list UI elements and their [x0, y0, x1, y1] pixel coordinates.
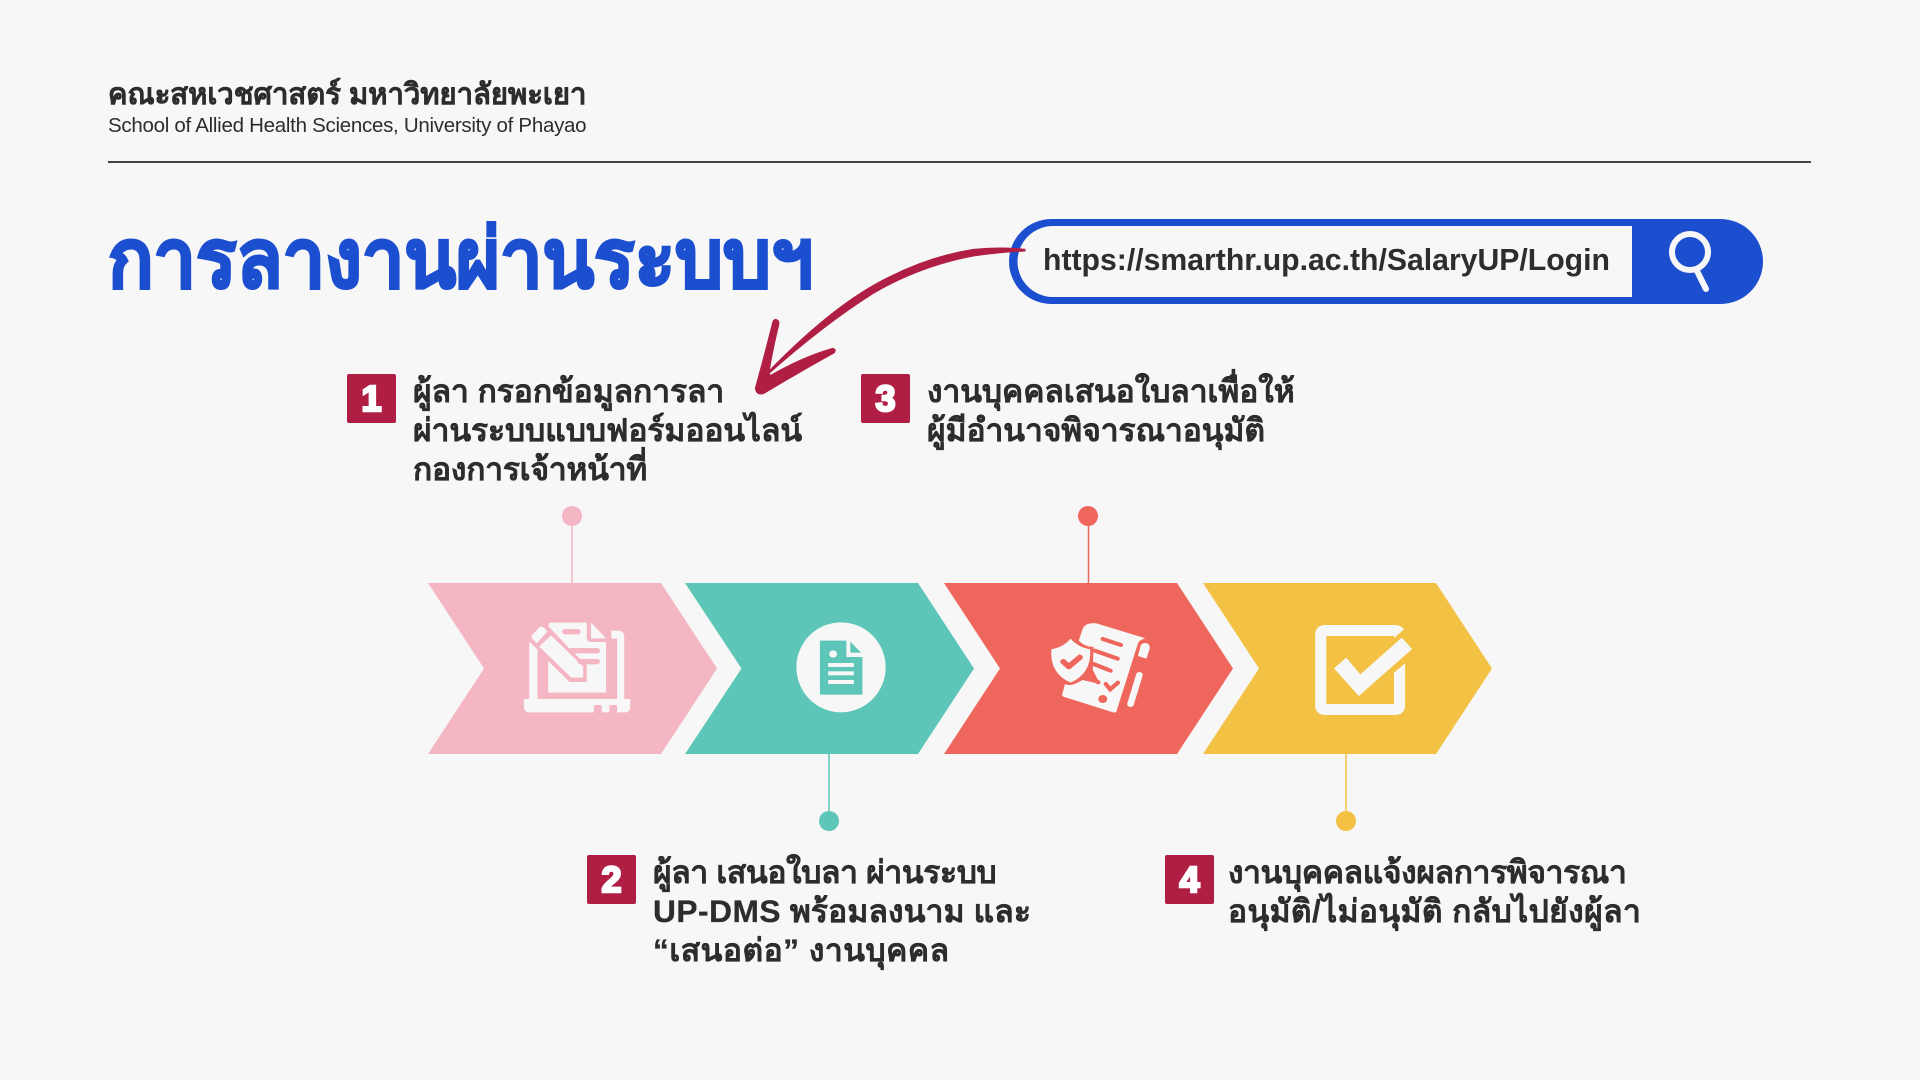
header: faculty name	[108, 78, 586, 137]
URL search bar	[1009, 219, 1763, 304]
step 2 text	[653, 854, 1031, 970]
connector: yellow dot	[1336, 753, 1356, 831]
step 2 text: “เสนอต่อ” งานบุคคล	[653, 932, 950, 968]
badge 1: 1	[361, 378, 382, 419]
badge 3	[861, 374, 910, 423]
step 2 text: ผู้ลา เสนอใบลา ผ่านระบบ	[653, 854, 996, 890]
badge 3: 3	[875, 378, 896, 419]
icon: laptop with form and pencil	[524, 623, 630, 712]
icon: shield and checklist	[1051, 623, 1150, 712]
icon: magnifier	[1672, 234, 1708, 289]
step 1 text: ผ่านระบบแบบฟอร์มออนไลน์	[413, 412, 802, 448]
connector: teal dot	[819, 753, 839, 831]
icon: document in circle	[796, 622, 886, 712]
step 3	[861, 368, 1295, 450]
step 1	[347, 373, 802, 487]
step 4 text: อนุมัติ/ไม่อนุมัติ กลับไปยังผู้ลา	[1228, 893, 1641, 929]
URL text: https://smarthr.up.ac.th/SalaryUP/Login	[1043, 244, 1610, 277]
step 1 text: ผู้ลา กรอกข้อมูลการลา	[413, 373, 724, 409]
step 3 text: งานบุคคลเสนอใบลาเพื่อให้	[927, 373, 1295, 409]
badge 2	[587, 855, 636, 904]
step 4 text: งานบุคคลแจ้งผลการพิจารณา	[1228, 854, 1626, 890]
step 3 text	[927, 368, 1295, 450]
badge 1	[347, 374, 396, 423]
badge 4	[1165, 855, 1214, 904]
chevron 4: yellow	[1203, 583, 1492, 754]
chevron 1: pink	[428, 583, 717, 754]
step 1 text: กองการเจ้าหน้าที่	[413, 451, 647, 487]
chevron 2: teal	[685, 583, 974, 754]
badge 2: 2	[601, 859, 622, 900]
icon: checkbox	[1315, 625, 1412, 715]
title: การลางานผ่านระบบฯ	[108, 214, 813, 305]
step 3 text: ผู้มีอำนาจพิจารณาอนุมัติ	[927, 412, 1265, 448]
chevron 3: coral	[944, 583, 1233, 754]
connector: coral dot	[1078, 506, 1098, 584]
connector: pink dot	[562, 506, 582, 584]
step 4 text	[1228, 854, 1641, 932]
faculty name in Thai: คณะสหเวชศาสตร์ มหาวิทยาลัยพะเยา	[108, 79, 586, 111]
faculty name in English: School of Allied Health Sciences, University of Phayao	[108, 114, 586, 137]
step 4	[1165, 854, 1641, 932]
step 2 text: UP-DMS พร้อมลงนาม และ	[653, 893, 1031, 929]
badge 4: 4	[1179, 859, 1200, 900]
step 2	[587, 854, 1031, 970]
step 1 text	[413, 373, 802, 487]
arrow from URL to step 1	[754, 248, 1026, 394]
